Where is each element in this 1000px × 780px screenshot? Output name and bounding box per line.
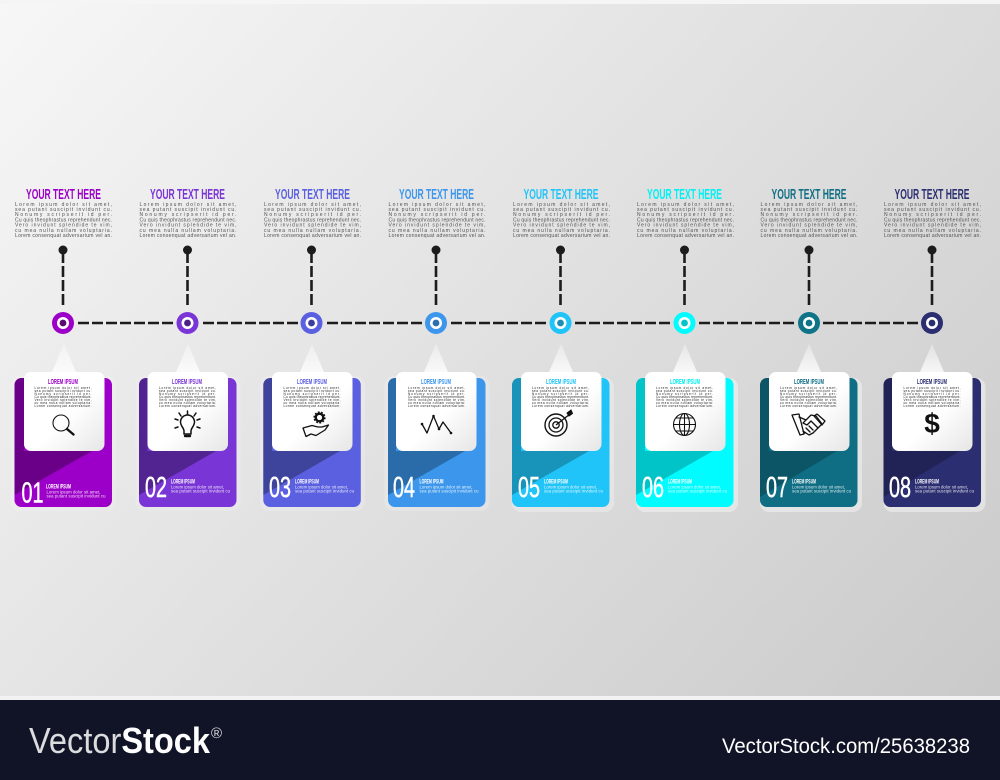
heading 04: YOUR TEXT HERE xyxy=(399,187,474,203)
card 02: 02 xyxy=(145,472,167,504)
card 05: Nonumy scripserit id per. xyxy=(532,392,589,396)
description 06: Nonumy scripserit id per. xyxy=(637,212,734,218)
description 01: Nonumy scripserit id per. xyxy=(15,212,112,218)
description 05: Vero invidunt splendide te vim, xyxy=(513,223,610,229)
description 01: Vero invidunt splendide te vim, xyxy=(15,223,112,229)
card 02: Nonumy scripserit id per. xyxy=(159,392,216,396)
heading 07: YOUR TEXT HERE xyxy=(772,187,847,203)
panel: step 08 xyxy=(884,187,986,512)
card 03: Nonumy scripserit id per. xyxy=(284,392,341,396)
description 08 xyxy=(884,202,981,239)
card 03: LOREM IPSUM xyxy=(295,480,319,486)
card 08: sea putant suscipit invidunt cu. xyxy=(904,389,961,393)
card 05: LOREM IPSUM xyxy=(546,379,576,386)
card 07: sea putant suscipit invidunt cu xyxy=(792,488,852,494)
card 08: Vero invidunt splendide te vim, xyxy=(904,398,961,402)
card 05: 05 xyxy=(518,472,540,504)
card 06: Lorem consenquat adversarium. xyxy=(656,404,713,408)
node 04 xyxy=(425,312,447,334)
card 03: cu mea nulla nullam voluptaria. xyxy=(284,401,341,405)
card 02 xyxy=(136,344,240,511)
card 08: 08 xyxy=(889,472,911,504)
card 05 xyxy=(512,344,614,512)
icon: target xyxy=(545,410,572,436)
description 04: sea putant suscipit invidunt cu. xyxy=(388,207,486,213)
card 04: Vero invidunt splendide te vim, xyxy=(408,398,465,402)
card 08: Nonumy scripserit id per. xyxy=(904,392,961,396)
card 08: LOREM IPSUM xyxy=(917,379,947,386)
description 07: Lorem consenquat adversarium vel an. xyxy=(760,233,858,239)
description 02: Lorem ipsum dolor sit amet, xyxy=(140,202,236,208)
description 01: Cu quis theophrastus reprehendunt nec. xyxy=(15,217,112,223)
card 01: cu mea nulla nullam voluptaria. xyxy=(34,401,92,405)
pin 05 xyxy=(556,246,565,308)
card 08: sea putant suscipit invidunt cu xyxy=(915,488,975,494)
card 07: LOREM IPSUM xyxy=(792,480,816,486)
description 03: cu mea nulla nullam voluptaria. xyxy=(264,228,361,234)
card 05: sea putant suscipit invidunt cu. xyxy=(532,389,589,393)
card 05: Cu quis theophrastus reprehendunt. xyxy=(532,395,589,399)
card 01: Lorem consenquat adversarium. xyxy=(34,404,92,408)
card 03: sea putant suscipit invidunt cu. xyxy=(284,389,341,393)
bottom light strip xyxy=(0,696,1000,700)
description 08: Lorem consenquat adversarium vel an. xyxy=(884,233,981,239)
description 08: Cu quis theophrastus reprehendunt nec. xyxy=(884,217,981,223)
node 06 xyxy=(674,312,696,334)
description 01 xyxy=(15,202,112,239)
card 07: Cu quis theophrastus reprehendunt. xyxy=(780,395,837,399)
description 01: Lorem consenquat adversarium vel an. xyxy=(15,233,112,239)
node 02 xyxy=(176,312,198,334)
timeline connector xyxy=(78,322,919,324)
card 08 xyxy=(884,344,986,512)
icon: gear on hand xyxy=(303,412,328,436)
description 03: Cu quis theophrastus reprehendunt nec. xyxy=(264,217,361,223)
description 05: Nonumy scripserit id per. xyxy=(513,212,610,218)
card 01: LOREM IPSUM xyxy=(48,379,78,386)
card 07: Nonumy scripserit id per. xyxy=(780,392,837,396)
description 07: Nonumy scripserit id per. xyxy=(760,212,858,218)
description 02 xyxy=(140,202,236,239)
card 05: sea putant suscipit invidunt cu xyxy=(544,488,604,494)
card 06: sea putant suscipit invidunt cu xyxy=(668,488,728,494)
card 07: 07 xyxy=(766,472,788,504)
card 05: Lorem consenquat adversarium. xyxy=(532,404,589,408)
node 01 xyxy=(52,312,74,334)
card 07: Lorem ipsum dolor sit amet, xyxy=(780,386,837,390)
card 06: cu mea nulla nullam voluptaria. xyxy=(656,401,713,405)
card 04: LOREM IPSUM xyxy=(420,480,444,486)
top light strip xyxy=(0,0,1000,4)
card 08: Lorem consenquat adversarium. xyxy=(904,404,961,408)
description 08: Vero invidunt splendide te vim, xyxy=(884,223,981,229)
card 02: Cu quis theophrastus reprehendunt. xyxy=(159,395,216,399)
card 07: cu mea nulla nullam voluptaria. xyxy=(780,401,837,405)
card 03: LOREM IPSUM xyxy=(297,379,327,386)
card 01: sea putant suscipit invidunt cu. xyxy=(34,389,92,393)
card 02: Lorem ipsum dolor sit amet, xyxy=(159,386,216,390)
description 05: Lorem ipsum dolor sit amet, xyxy=(513,202,610,208)
card 02: sea putant suscipit invidunt cu. xyxy=(159,389,216,393)
pin 07 xyxy=(804,246,814,308)
card 07: sea putant suscipit invidunt cu. xyxy=(780,389,837,393)
card 04: Lorem ipsum dolor sit amet, xyxy=(420,484,472,490)
description 02: Vero invidunt splendide te vim, xyxy=(140,223,236,229)
card 07: Lorem ipsum dolor sit amet, xyxy=(792,484,845,490)
description 01: cu mea nulla nullam voluptaria. xyxy=(15,228,112,234)
icon: line chart xyxy=(421,415,452,434)
card 04: sea putant suscipit invidunt cu. xyxy=(408,389,465,393)
card 08: Cu quis theophrastus reprehendunt. xyxy=(904,395,961,399)
card 04: Lorem ipsum dolor sit amet, xyxy=(408,386,465,390)
registered mark: ® xyxy=(211,725,222,742)
pin 08 xyxy=(928,246,936,308)
description 05 xyxy=(513,202,610,239)
card 01: Vero invidunt splendide te vim, xyxy=(34,398,92,402)
description 03: Lorem ipsum dolor sit amet, xyxy=(264,202,361,208)
heading 05: YOUR TEXT HERE xyxy=(524,187,599,203)
heading 03: YOUR TEXT HERE xyxy=(275,187,350,203)
description 06: Lorem ipsum dolor sit amet, xyxy=(637,202,734,208)
pin 04 xyxy=(432,246,440,308)
card 06: Lorem ipsum dolor sit amet, xyxy=(656,386,713,390)
description 03: Vero invidunt splendide te vim, xyxy=(264,223,361,229)
footer logo: VectorStock xyxy=(29,720,211,761)
card 03: Cu quis theophrastus reprehendunt. xyxy=(284,395,341,399)
pin 06 xyxy=(680,246,689,308)
description 04 xyxy=(388,202,486,239)
card 05: cu mea nulla nullam voluptaria. xyxy=(532,401,589,405)
description 07: cu mea nulla nullam voluptaria. xyxy=(760,228,858,234)
card 02: LOREM IPSUM xyxy=(172,379,202,386)
description 06: cu mea nulla nullam voluptaria. xyxy=(637,228,734,234)
pin 01 xyxy=(58,246,68,308)
card 05: LOREM IPSUM xyxy=(544,480,568,486)
icon: dollar sign: $ xyxy=(924,408,940,439)
card 03: Vero invidunt splendide te vim, xyxy=(284,398,341,402)
description 05: cu mea nulla nullam voluptaria. xyxy=(513,228,610,234)
card 08: Lorem ipsum dolor sit amet, xyxy=(904,386,961,390)
card 04: Cu quis theophrastus reprehendunt. xyxy=(408,395,465,399)
card 03: Lorem consenquat adversarium. xyxy=(284,404,341,408)
node 07 xyxy=(798,312,820,334)
card 05: Vero invidunt splendide te vim, xyxy=(532,398,589,402)
footer image id: VectorStock.com/25638238 xyxy=(722,735,970,758)
description 03: Nonumy scripserit id per. xyxy=(264,212,361,218)
description 07: sea putant suscipit invidunt cu. xyxy=(760,207,858,213)
panel: step 06 xyxy=(636,187,738,512)
description 08: Lorem ipsum dolor sit amet, xyxy=(884,202,981,208)
description 06 xyxy=(637,202,734,239)
description 07: Vero invidunt splendide te vim, xyxy=(760,223,858,229)
card 01: Cu quis theophrastus reprehendunt. xyxy=(34,395,92,399)
description 06: Vero invidunt splendide te vim, xyxy=(637,223,734,229)
card 03 xyxy=(260,344,365,511)
description 03 xyxy=(264,202,361,239)
description 07 xyxy=(760,202,858,239)
heading 02: YOUR TEXT HERE xyxy=(150,187,225,203)
description 05: Cu quis theophrastus reprehendunt nec. xyxy=(513,217,610,223)
card 04: sea putant suscipit invidunt cu xyxy=(420,488,479,494)
card 06: LOREM IPSUM xyxy=(670,379,700,386)
description 08: cu mea nulla nullam voluptaria. xyxy=(884,228,981,234)
description 01: Lorem ipsum dolor sit amet, xyxy=(15,202,112,208)
card 06 xyxy=(636,344,738,512)
heading 01: YOUR TEXT HERE xyxy=(26,187,101,203)
card 04: LOREM IPSUM xyxy=(421,379,451,386)
card 08: Lorem ipsum dolor sit amet, xyxy=(915,484,968,490)
footer band xyxy=(0,700,1000,780)
card 04 xyxy=(384,344,490,511)
node 08 xyxy=(921,312,943,334)
panel: step 07 xyxy=(760,187,862,512)
card 03: Lorem ipsum dolor sit amet, xyxy=(295,484,348,490)
card 06: Lorem ipsum dolor sit amet, xyxy=(668,484,721,490)
panel: step 04 xyxy=(384,187,490,511)
description 03: sea putant suscipit invidunt cu. xyxy=(264,207,361,213)
description 01: sea putant suscipit invidunt cu. xyxy=(15,207,112,213)
card 08: LOREM IPSUM xyxy=(915,480,939,486)
card 02: Lorem consenquat adversarium. xyxy=(159,404,216,408)
description 02: Cu quis theophrastus reprehendunt nec. xyxy=(140,217,236,223)
card 07: LOREM IPSUM xyxy=(794,379,824,386)
card 04: Nonumy scripserit id per. xyxy=(408,392,465,396)
icon: globe xyxy=(674,414,696,436)
pin 02 xyxy=(183,246,192,308)
card 04: 04 xyxy=(393,472,415,504)
description 08: Nonumy scripserit id per. xyxy=(884,212,981,218)
icon: magnifier xyxy=(53,415,74,434)
panel: step 05 xyxy=(512,187,614,512)
card 03: 03 xyxy=(269,472,291,504)
card 02: Lorem ipsum dolor sit amet, xyxy=(171,484,224,490)
description 05: sea putant suscipit invidunt cu. xyxy=(513,207,610,213)
card 07 xyxy=(760,344,862,512)
description 04: Nonumy scripserit id per. xyxy=(388,212,486,218)
card 02: cu mea nulla nullam voluptaria. xyxy=(159,401,216,405)
card 07: Lorem consenquat adversarium. xyxy=(780,404,837,408)
card 03: Lorem ipsum dolor sit amet, xyxy=(284,386,341,390)
description 03: Lorem consenquat adversarium vel an. xyxy=(264,233,361,239)
card 01: Lorem ipsum dolor sit amet, xyxy=(34,386,92,390)
icon: handshake xyxy=(792,414,825,435)
description 02: Nonumy scripserit id per. xyxy=(140,212,236,218)
card 07: Vero invidunt splendide te vim, xyxy=(780,398,837,402)
card 06: LOREM IPSUM xyxy=(668,480,692,486)
node 03 xyxy=(300,312,322,334)
description 05: Lorem consenquat adversarium vel an. xyxy=(513,233,610,239)
heading 06: YOUR TEXT HERE xyxy=(647,187,722,203)
node 05 xyxy=(550,312,572,334)
card 06: 06 xyxy=(642,472,664,504)
card 08: cu mea nulla nullam voluptaria. xyxy=(904,401,961,405)
card 01 xyxy=(11,344,116,511)
card 04: Lorem consenquat adversarium. xyxy=(408,404,465,408)
card 05: Lorem ipsum dolor sit amet, xyxy=(544,484,597,490)
card 06: sea putant suscipit invidunt cu. xyxy=(656,389,713,393)
card 01: 01 xyxy=(22,478,44,510)
panel: step 02 xyxy=(136,187,240,511)
panel: step 01 xyxy=(11,187,116,511)
card 01: Lorem ipsum dolor sit amet, xyxy=(46,490,100,494)
description 08: sea putant suscipit invidunt cu. xyxy=(884,207,981,213)
description 02: cu mea nulla nullam voluptaria. xyxy=(140,228,236,234)
card 05: Lorem ipsum dolor sit amet, xyxy=(532,386,589,390)
panel: step 03 xyxy=(260,187,365,511)
card 06: Cu quis theophrastus reprehendunt. xyxy=(656,395,713,399)
description 02: Lorem consenquat adversarium vel an. xyxy=(140,233,236,239)
card 06: Nonumy scripserit id per. xyxy=(656,392,713,396)
card 02: Vero invidunt splendide te vim, xyxy=(159,398,216,402)
description 04: Vero invidunt splendide te vim, xyxy=(388,223,486,229)
card 06: Vero invidunt splendide te vim, xyxy=(656,398,713,402)
description 06: Cu quis theophrastus reprehendunt nec. xyxy=(637,217,734,223)
card 02: LOREM IPSUM xyxy=(171,480,195,486)
description 07: Cu quis theophrastus reprehendunt nec. xyxy=(760,217,858,223)
card 01: LOREM IPSUM xyxy=(46,484,71,490)
description 06: Lorem consenquat adversarium vel an. xyxy=(637,233,734,239)
icon: light bulb xyxy=(175,411,200,436)
description 07: Lorem ipsum dolor sit amet, xyxy=(760,202,858,208)
description 04: Cu quis theophrastus reprehendunt nec. xyxy=(388,217,486,223)
description 04: cu mea nulla nullam voluptaria. xyxy=(388,228,486,234)
pin 03 xyxy=(307,246,316,308)
card 03: sea putant suscipit invidunt cu xyxy=(295,488,355,494)
description 02: sea putant suscipit invidunt cu. xyxy=(140,207,236,213)
card 01: sea putant suscipit invidunt cu xyxy=(46,494,106,498)
card 01: Nonumy scripserit id per. xyxy=(34,392,92,396)
description 06: sea putant suscipit invidunt cu. xyxy=(637,207,734,213)
card 02: sea putant suscipit invidunt cu xyxy=(171,488,231,494)
description 04: Lorem ipsum dolor sit amet, xyxy=(388,202,486,208)
card 04: cu mea nulla nullam voluptaria. xyxy=(408,401,465,405)
description 04: Lorem consenquat adversarium vel an. xyxy=(388,233,486,239)
